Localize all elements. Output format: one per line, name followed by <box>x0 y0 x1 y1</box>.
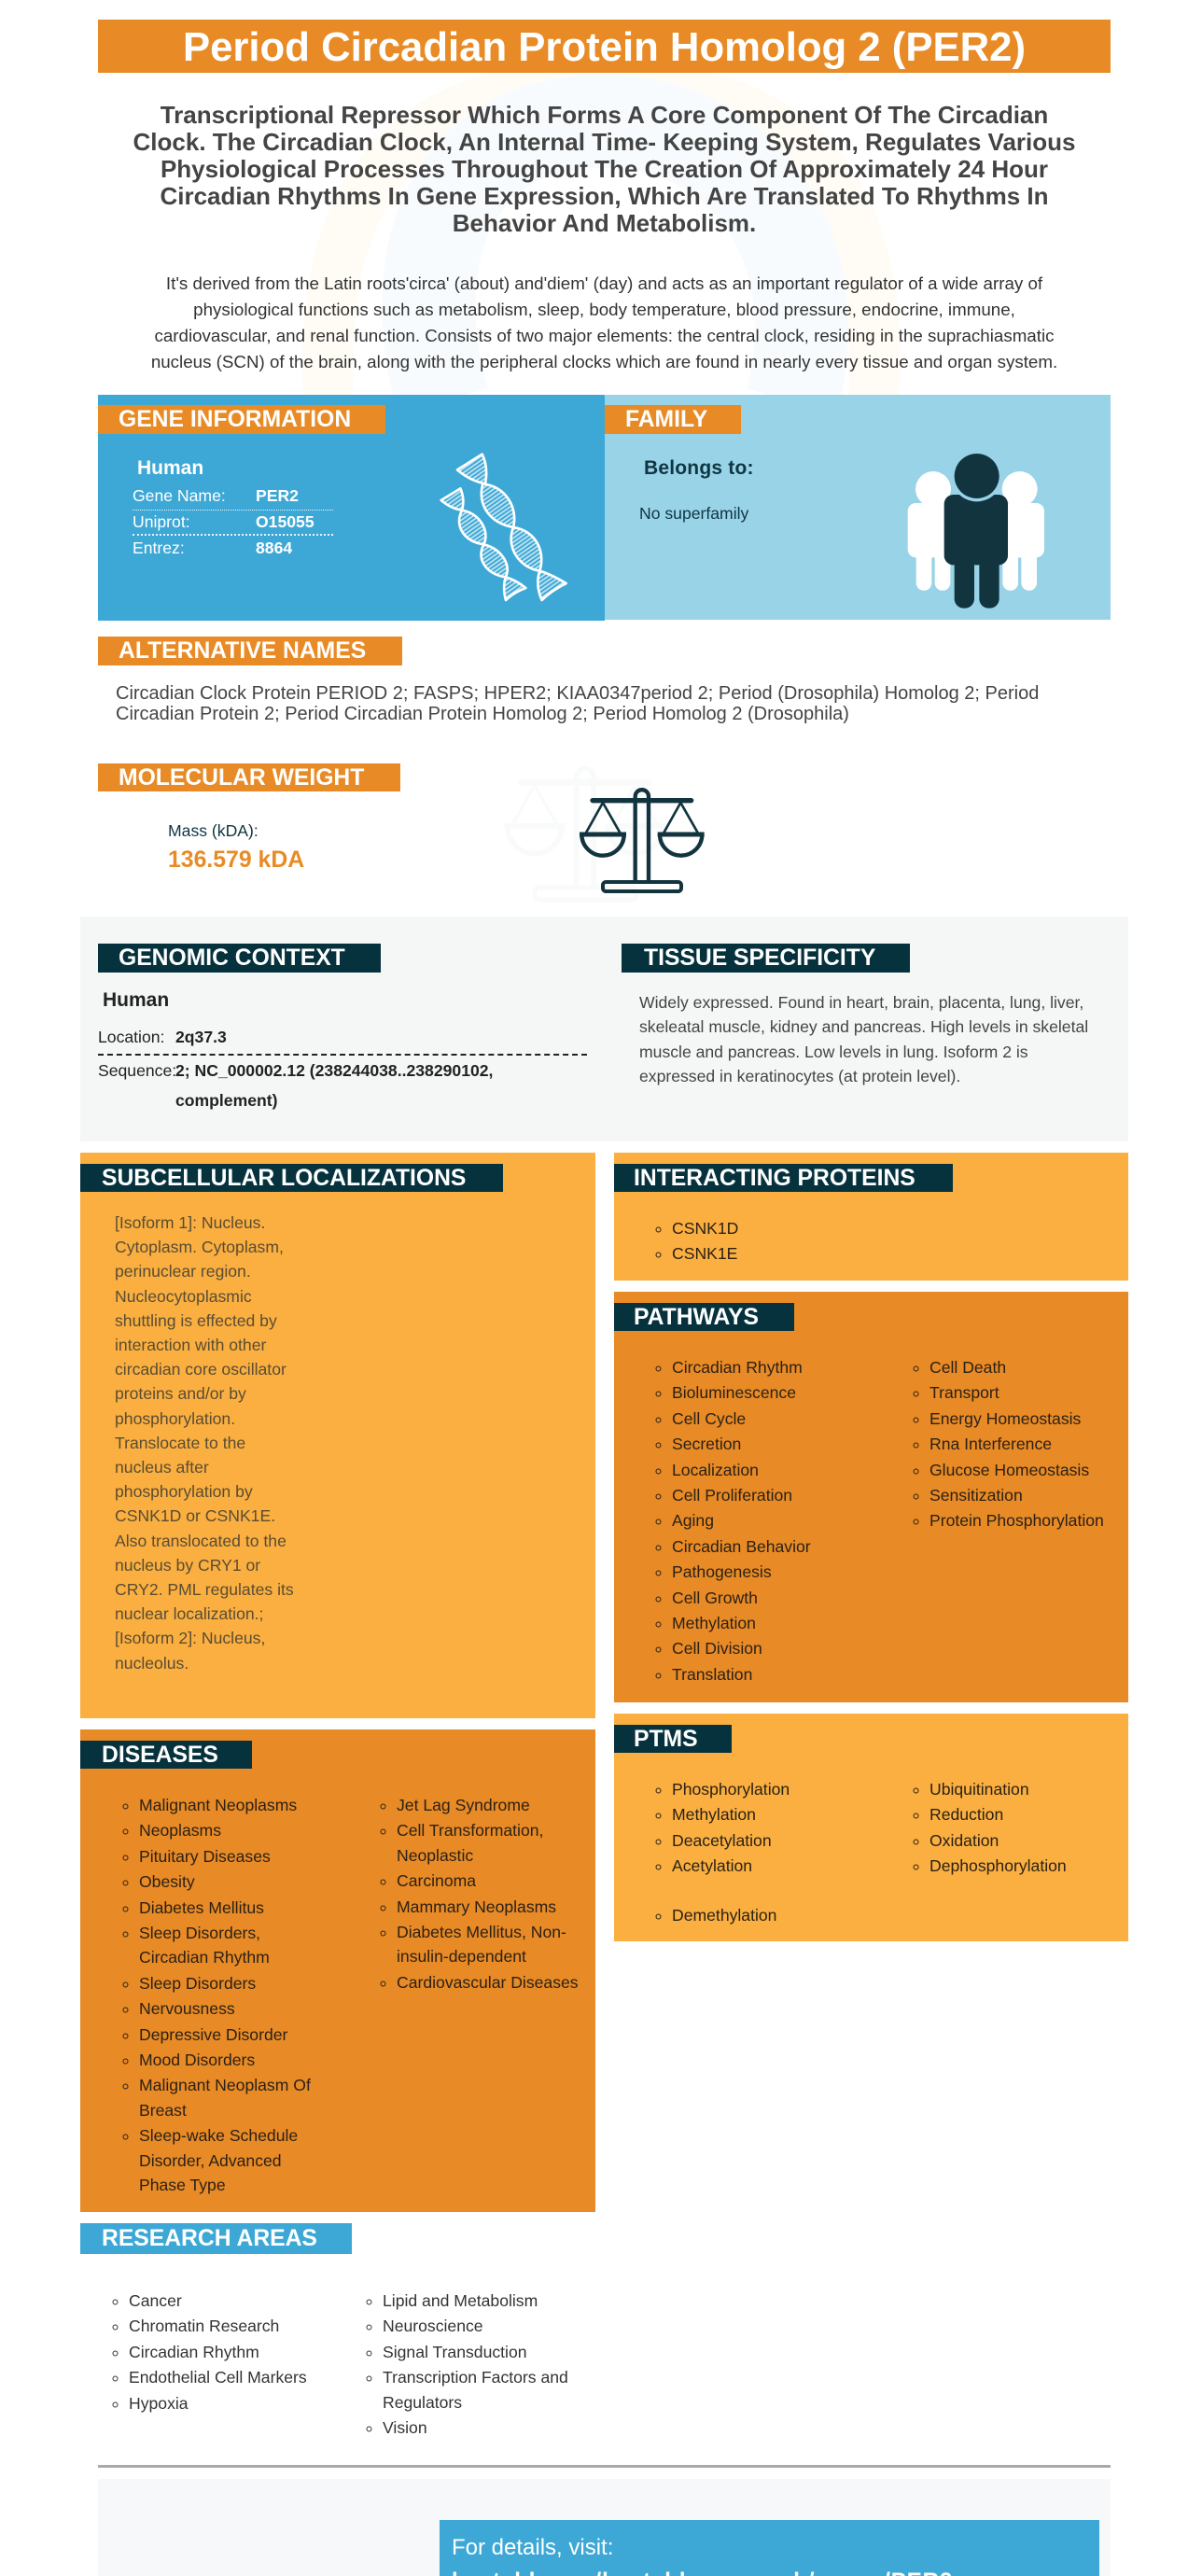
heading: research areas: RESEARCH AREAS <box>102 2226 317 2251</box>
subtitle <box>133 101 1075 237</box>
list: diseases column 2: Cell Transformation, <box>397 1821 543 1840</box>
list: ptms column 1: Phosphorylation <box>672 1780 790 1799</box>
list: pathways column 2: Transport <box>929 1383 999 1402</box>
icon: three people <box>907 454 1044 609</box>
list: pathways column 1 <box>655 1358 811 1684</box>
subcellular text: nucleolus. <box>115 1654 189 1673</box>
heading: family: FAMILY <box>625 407 707 432</box>
list: diseases column 2: Carcinoma <box>397 1871 476 1890</box>
list: diseases column 1: Sleep-wake Schedule <box>139 2126 298 2145</box>
footer panel <box>98 2479 1111 2576</box>
list: pathways column 2: Sensitization <box>929 1486 1023 1505</box>
subcellular text: [Isoform 1]: Nucleus. <box>115 1213 265 1232</box>
block: tissue specificity <box>622 944 1088 1085</box>
heading: research areas <box>80 2223 352 2254</box>
entrez row <box>133 534 333 559</box>
heading: subcellular localizations: SUBCELLULAR LOCALIZATIONS <box>102 1166 466 1191</box>
list: pathways column 1: Circadian Behavior <box>672 1537 811 1556</box>
subtitle: Clock. The Circadian Clock, An Internal Time- Keeping System, Regulates Various <box>133 128 1075 156</box>
uniprot row <box>133 510 333 534</box>
list: pathways column 1: Translation <box>672 1665 752 1684</box>
heading: family <box>605 405 741 434</box>
list: research areas column 2: Transcription Factors and <box>383 2368 568 2387</box>
list: diseases column 2: Mammary Neoplasms <box>397 1897 556 1916</box>
icon: balance scale <box>580 788 705 893</box>
sequence row: Sequence: <box>98 1061 176 1080</box>
intro paragraph <box>151 273 1057 371</box>
list: research areas column 1: Cancer <box>129 2291 182 2310</box>
subtitle: Physiological Processes Throughout The Creation Of Approximately 24 Hour <box>161 155 1048 183</box>
subcellular text: nucleus after <box>115 1458 209 1477</box>
family value: No superfamily <box>639 504 748 523</box>
list: research areas column 1: Circadian Rhythm <box>129 2343 259 2361</box>
list: pathways column 2: Glucose Homeostasis <box>929 1461 1089 1479</box>
list: research areas column 1: Hypoxia <box>129 2394 189 2413</box>
panel: diseases <box>80 1729 595 2212</box>
subcellular text: proteins and/or by <box>115 1384 246 1403</box>
list: pathways column 1: Methylation <box>672 1614 756 1632</box>
list: diseases column 2: Cardiovascular Diseases <box>397 1973 579 1992</box>
title banner: Period Circadian Protein Homolog 2 (PER2) <box>183 24 1026 70</box>
background watermark <box>302 73 900 395</box>
subcellular text: CSNK1D or CSNK1E. <box>115 1506 275 1525</box>
list: ptms column 2: Dephosphorylation <box>929 1856 1067 1875</box>
uniprot row: Uniprot: <box>133 512 190 531</box>
tissue specificity text: muscle and pancreas. Low levels in lung. Isoform 2 is <box>639 1043 1028 1061</box>
list: diseases column 1: Sleep Disorders <box>139 1974 256 1993</box>
list: interacting proteins: CSNK1D <box>672 1219 738 1238</box>
location row: Location: <box>98 1028 164 1046</box>
list: diseases column 1: Circadian Rhythm <box>139 1948 270 1967</box>
list: diseases column 2 <box>381 1796 579 1992</box>
gene name row: Gene Name: <box>133 486 226 505</box>
section: alternative names <box>98 637 1039 724</box>
intro paragraph: cardiovascular, and renal function. Consists of two major elements: the central clock, residing in the suprachiasmatic <box>154 326 1055 345</box>
panel: interacting proteins <box>614 1153 1128 1281</box>
callout: details link box: For details, visit: <box>452 2535 613 2560</box>
heading: gene information: GENE INFORMATION <box>119 407 351 432</box>
subtitle: Behavior And Metabolism. <box>453 209 756 237</box>
list: pathways column 1: Secretion <box>672 1435 741 1453</box>
list: ptms extra item: Demethylation <box>672 1906 776 1925</box>
list: research areas column 2: Lipid and Metabolism <box>383 2291 538 2310</box>
list: diseases column 1 <box>123 1796 311 2194</box>
subcellular text: Nucleocytoplasmic <box>115 1287 252 1306</box>
subcellular text: phosphorylation by <box>115 1482 253 1501</box>
list: pathways column 1: Cell Cycle <box>672 1409 746 1428</box>
gene name row <box>133 486 299 505</box>
list: diseases column 1: Malignant Neoplasm Of <box>139 2076 311 2094</box>
list: interacting proteins: CSNK1E <box>672 1244 737 1263</box>
subtitle: Circadian Rhythms In Gene Expression, Which Are Translated To Rhythms In <box>160 182 1049 210</box>
mass label: Mass (kDA): <box>168 821 259 840</box>
heading: interacting proteins: INTERACTING PROTEINS <box>634 1166 915 1191</box>
list: interacting proteins <box>655 1219 738 1263</box>
subcellular text: CRY2. PML regulates its <box>115 1580 294 1599</box>
list: pathways column 1: Cell Division <box>672 1639 762 1658</box>
heading: tissue specificity <box>622 944 910 973</box>
panel: subcellular localizations <box>80 1153 595 1718</box>
section: molecular weight <box>98 763 705 893</box>
list: research areas column 1: Endothelial Cell Markers <box>129 2368 307 2387</box>
entrez row: 8864 <box>256 539 292 557</box>
section: research areas <box>80 2223 568 2437</box>
belongs to label: Belongs to: <box>644 457 754 479</box>
list: pathways column 1: Localization <box>672 1461 759 1479</box>
intro paragraph: nucleus (SCN) of the brain, along with the peripheral clocks which are found in nearly every tissue and organ system. <box>151 352 1057 371</box>
list: pathways column 1: Circadian Rhythm <box>672 1358 803 1377</box>
alternative names text: Circadian Protein 2; Period Circadian Protein Homolog 2; Period Homolog 2 (Drosophila) <box>116 704 849 724</box>
species label: Human <box>103 989 169 1011</box>
intro paragraph: physiological functions such as metabolism, sleep, body temperature, blood pressure, endocrine, immune, <box>193 300 1015 319</box>
intro paragraph: It's derived from the Latin roots'circa' (about) and'diem' (day) and acts as an important regulator of a wide array of <box>166 273 1042 293</box>
subcellular text <box>115 1213 294 1673</box>
panel: gene information <box>98 395 605 621</box>
list: research areas column 1: Chromatin Research <box>129 2317 279 2335</box>
list: diseases column 2: insulin-dependent <box>397 1947 526 1966</box>
list: ptms column 2 <box>913 1780 1067 1875</box>
list: ptms column 1: Deacetylation <box>672 1831 772 1850</box>
subtitle: Transcriptional Repressor Which Forms A Core Component Of The Circadian <box>161 101 1048 129</box>
list: research areas column 2: Vision <box>383 2418 427 2437</box>
list: ptms column 2: Oxidation <box>929 1831 999 1850</box>
heading: diseases: DISEASES <box>102 1743 218 1768</box>
list: pathways column 2: Rna Interference <box>929 1435 1052 1453</box>
list: pathways column 2: Cell Death <box>929 1358 1006 1377</box>
panel: family <box>605 395 1111 620</box>
tissue specificity text: skeleatal muscle, kidney and pancreas. High levels in skeletal <box>639 1017 1088 1036</box>
subcellular text: nucleus by CRY1 or <box>115 1556 260 1575</box>
list: diseases column 2: Jet Lag Syndrome <box>397 1796 530 1814</box>
tissue specificity text: Widely expressed. Found in heart, brain, placenta, lung, liver, <box>639 993 1083 1012</box>
gene name row: PER2 <box>256 486 299 505</box>
list: research areas column 2: Signal Transduction <box>383 2343 527 2361</box>
heading: pathways <box>614 1303 794 1331</box>
list: pathways column 2 <box>913 1358 1104 1530</box>
panel: genomic context and tissue specificity <box>80 917 1128 1141</box>
location row: 2q37.3 <box>175 1028 227 1046</box>
heading: genomic context: GENOMIC CONTEXT <box>119 945 345 971</box>
list: ptms column 1 <box>655 1780 790 1875</box>
list: ptms column 2: Ubiquitination <box>929 1780 1029 1799</box>
subcellular text: phosphorylation. <box>115 1409 235 1428</box>
alternative names text <box>116 683 1039 724</box>
panel: ptms <box>614 1714 1128 1941</box>
heading: ptms <box>614 1725 732 1753</box>
list: diseases column 1: Obesity <box>139 1872 195 1891</box>
list: research areas column 2 <box>366 2291 568 2437</box>
list: research areas column 2: Neuroscience <box>383 2317 483 2335</box>
panel: pathways <box>614 1292 1128 1702</box>
callout: details link box <box>440 2520 1099 2576</box>
subcellular text: nuclear localization.; <box>115 1604 263 1623</box>
subcellular text: [Isoform 2]: Nucleus, <box>115 1629 265 1647</box>
list: diseases column 2: Neoplastic <box>397 1846 473 1865</box>
subcellular text: Translocate to the <box>115 1434 245 1452</box>
list: ptms column 1: Acetylation <box>672 1856 752 1875</box>
list: pathways column 1: Pathogenesis <box>672 1562 772 1581</box>
subcellular text: Cytoplasm. Cytoplasm, <box>115 1238 284 1256</box>
uniprot row: O15055 <box>256 512 314 531</box>
list: diseases column 1: Pituitary Diseases <box>139 1847 271 1866</box>
heading: ptms: PTMS <box>634 1727 698 1752</box>
heading: genomic context <box>98 944 381 973</box>
list: ptms column 1: Methylation <box>672 1805 756 1824</box>
list: diseases column 1: Diabetes Mellitus <box>139 1898 264 1917</box>
location row <box>98 1028 227 1046</box>
icon: dna helices <box>440 453 567 601</box>
alternative names text: Circadian Clock Protein PERIOD 2; FASPS; HPER2; KIAA0347period 2; Period (Drosophila) Homolog 2; Period <box>116 683 1039 704</box>
list: diseases column 1: Breast <box>139 2101 187 2120</box>
list: ptms column 2: Reduction <box>929 1805 1003 1824</box>
list: pathways column 1: Aging <box>672 1511 714 1530</box>
species label: Human <box>137 457 203 479</box>
list: research areas column 1 <box>112 2291 307 2413</box>
list: diseases column 1: Mood Disorders <box>139 2051 255 2069</box>
list: research areas column 2: Regulators <box>383 2393 462 2412</box>
list: diseases column 1: Nervousness <box>139 1999 235 2018</box>
mass value: 136.579 kDA <box>168 847 304 873</box>
list: diseases column 1: Phase Type <box>139 2176 226 2194</box>
list: diseases column 1: Disorder, Advanced <box>139 2151 282 2170</box>
subcellular text: Also translocated to the <box>115 1532 287 1550</box>
list: pathways column 2: Protein Phosphorylation <box>929 1511 1104 1530</box>
list: pathways column 1: Cell Proliferation <box>672 1486 792 1505</box>
list: diseases column 1: Neoplasms <box>139 1821 221 1840</box>
subcellular text: interaction with other <box>115 1336 266 1354</box>
list: diseases column 1: Malignant Neoplasms <box>139 1796 297 1814</box>
block: genomic context <box>98 944 587 1110</box>
sequence row: complement) <box>175 1091 278 1110</box>
sequence row <box>98 1054 587 1120</box>
tissue specificity text: expressed in keratinocytes (at protein level). <box>639 1067 960 1085</box>
heading: molecular weight: MOLECULAR WEIGHT <box>119 765 364 791</box>
list: diseases column 2: Diabetes Mellitus, Non- <box>397 1923 566 1941</box>
heading: diseases <box>80 1741 252 1769</box>
heading: alternative names: ALTERNATIVE NAMES <box>119 638 366 664</box>
list: diseases column 1: Sleep Disorders, <box>139 1924 260 1942</box>
tissue specificity text <box>639 993 1088 1085</box>
heading: pathways: PATHWAYS <box>634 1305 759 1330</box>
subcellular text: circadian core oscillator <box>115 1360 287 1379</box>
list: pathways column 1: Bioluminescence <box>672 1383 796 1402</box>
subcellular text: perinuclear region. <box>115 1262 251 1281</box>
list: pathways column 2: Energy Homeostasis <box>929 1409 1081 1428</box>
list: diseases column 1: Depressive Disorder <box>139 2025 287 2044</box>
entrez row: Entrez: <box>133 539 185 557</box>
subcellular text: shuttling is effected by <box>115 1311 277 1330</box>
list: pathways column 1: Cell Growth <box>672 1589 758 1607</box>
sequence row: 2; NC_000002.12 (238244038..238290102, <box>175 1061 493 1080</box>
heading: tissue specificity: TISSUE SPECIFICITY <box>644 945 875 971</box>
